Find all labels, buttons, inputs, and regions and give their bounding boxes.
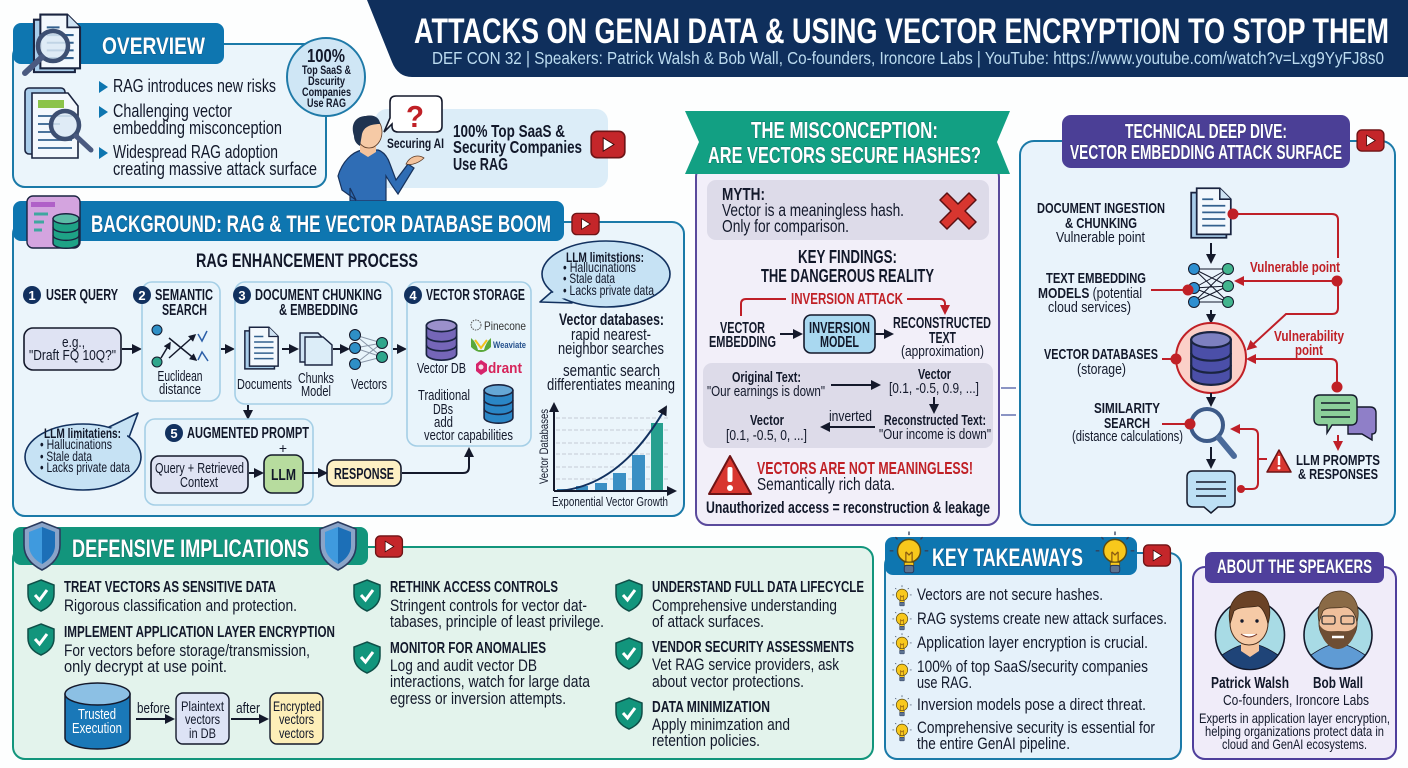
takeaway list: Vectors are not secure hashes. — [917, 586, 1103, 604]
speaker names — [1211, 675, 1369, 709]
callout text: Use RAG — [453, 154, 508, 174]
inversion attack diagram: INVERSION ATTACK — [791, 291, 903, 308]
overview bullets: Widespread RAG adoption — [113, 142, 278, 162]
step 5: augmented prompt: AUGMENTED PROMPT — [187, 425, 309, 442]
takeaway list: Comprehensive security is essential for — [917, 719, 1155, 737]
example box: Vector — [918, 367, 951, 383]
stage labels: cloud services) — [1048, 299, 1131, 316]
panel: defensive implications — [13, 522, 873, 759]
item: vendor security assessments: VENDOR SECURITY ASSESSMENTS — [652, 639, 854, 656]
speech bubble: LLM limitations left: • Hallucinations — [40, 436, 112, 452]
step 4: vector storage: Weaviate — [493, 340, 526, 350]
step 4: vector storage: drant — [488, 360, 522, 377]
stage labels — [1037, 200, 1183, 445]
diagram: encryption flow: vectors — [185, 711, 220, 727]
item: application layer encryption: For vectors before storage/transmission, — [64, 642, 310, 660]
speaker bio: cloud and GenAI ecosystems. — [1222, 736, 1367, 752]
myth box: MYTH: — [722, 184, 765, 204]
stage labels: SIMILARITY — [1094, 400, 1160, 417]
arrow — [1210, 243, 1212, 262]
step 2: semantic search: SEMANTIC — [155, 287, 213, 304]
speaker bio — [1199, 710, 1390, 752]
step 2: semantic search: Euclidean — [158, 369, 202, 385]
inversion attack diagram: VECTOR — [720, 320, 765, 337]
heading bar: KEY TAKEAWAYS — [932, 544, 1083, 572]
heading bar — [1062, 115, 1350, 168]
example box: Reconstructed Text: — [884, 413, 986, 429]
panel: technical deep dive — [1020, 115, 1395, 525]
response box: RESPONSE — [334, 466, 394, 483]
inversion attack diagram: EMBEDDING — [709, 334, 776, 351]
heading bar — [885, 532, 1137, 575]
step 3: document chunking and embedding: Chunks — [298, 371, 334, 387]
inversion attack diagram — [709, 291, 991, 360]
panel: securing AI callout — [338, 96, 625, 201]
stage labels: Vulnerable point — [1056, 229, 1146, 246]
inversion attack diagram: (approximation) — [901, 343, 984, 360]
heading: key findings: THE DANGEROUS REALITY — [761, 265, 934, 286]
icon: report magnifier — [25, 88, 91, 158]
callout text: Security Companies — [453, 137, 582, 157]
diagram: encryption flow — [65, 683, 323, 749]
item: understand data lifecycle — [616, 579, 864, 631]
speech bubble: question mark: ? — [406, 99, 424, 134]
stage labels: (distance calculations) — [1072, 428, 1183, 445]
arrow: response to storage — [402, 449, 469, 473]
speech bubble: LLM limitations left: • Stale data — [40, 448, 92, 464]
speech bubble: LLM limitations right: LLM limitstions: — [566, 249, 644, 265]
ribbon heading: ARE VECTORS SECURE HASHES? — [708, 142, 981, 168]
panel: overview — [13, 15, 365, 187]
step 3: document chunking and embedding: 3 — [238, 288, 246, 303]
step 4: vector storage: VECTOR STORAGE — [426, 287, 525, 304]
item: application layer encryption — [28, 624, 335, 676]
panel: background RAG — [13, 196, 684, 516]
overview bullets — [99, 76, 317, 179]
arrow — [221, 348, 233, 350]
item: monitor for anomalies: MONITOR FOR ANOMALIES — [390, 640, 546, 657]
arrow: bracket to magnifier — [1232, 429, 1267, 459]
diagram: encryption flow: Encrypted — [273, 698, 321, 714]
warning: vectors are not meaningless: VECTORS ARE NOT MEANINGLESS! — [757, 458, 973, 478]
speech bubble: LLM limitations left: LLM limitatiens: — [44, 425, 121, 441]
label: LLM prompts and responses — [1296, 452, 1380, 483]
item: data minimization: DATA MINIMIZATION — [652, 699, 770, 716]
label: LLM prompts and responses: & RESPONSES — [1298, 466, 1378, 483]
item: treat vectors: Rigorous classification and protection. — [64, 597, 297, 615]
example box: "Our income is down" — [879, 427, 991, 443]
step 1: user query: USER QUERY — [46, 287, 118, 304]
connector dashes — [1001, 388, 1016, 415]
example box: inverted — [829, 409, 872, 425]
item: vendor security assessments: about vector protections. — [652, 673, 804, 691]
step 5: augmented prompt: + — [279, 440, 287, 456]
text: vector databases: semantic search — [563, 361, 660, 380]
icon: video button — [1144, 545, 1170, 566]
item: application layer encryption: only decrypt at use point. — [64, 658, 227, 676]
step 3: document chunking and embedding: DOCUMENT CHUNKING — [255, 287, 382, 304]
icon: document — [1191, 188, 1231, 238]
arrow — [122, 348, 140, 350]
callout text — [453, 121, 582, 174]
stage labels: VECTOR DATABASES — [1044, 346, 1158, 363]
diagram: encryption flow: after — [236, 700, 260, 717]
callout: 100% badge — [287, 38, 365, 116]
label: vulnerability point: point — [1295, 342, 1323, 359]
callout: 100% badge: Use RAG — [307, 96, 346, 110]
example box — [703, 363, 993, 448]
item: understand data lifecycle: of attack surfaces. — [652, 613, 764, 631]
item: monitor for anomalies: Log and audit vector DB — [390, 657, 537, 675]
icon: video button — [591, 131, 625, 158]
step 4: vector storage: Vector DB — [417, 360, 466, 377]
callout: 100% badge: Top SaaS & — [302, 63, 351, 77]
speaker names: Co-founders, Ironcore Labs — [1223, 692, 1369, 709]
diagram: encryption flow: vectors — [279, 711, 314, 727]
portrait: Bob Wall — [1304, 591, 1372, 669]
example box: [0.1, -0.5, 0, ...] — [726, 428, 807, 444]
text: vector databases: rapid nearest- — [571, 325, 651, 344]
speech bubble: LLM limitations right: • Stale data — [563, 270, 615, 286]
callout text: 100% Top SaaS & — [453, 121, 565, 141]
heading: key findings: KEY FINDINGS: — [798, 246, 897, 267]
label: vulnerable point: Vulnerable point — [1250, 259, 1340, 276]
speech bubble: LLM limitations right: • Hallucinations — [563, 259, 636, 275]
step 4: vector storage — [404, 282, 531, 446]
diagram: encryption flow: Execution — [72, 720, 122, 737]
text: unauthorized access: Unauthorized access = reconstruction & leakage — [706, 499, 990, 517]
speaker names: Bob Wall — [1313, 675, 1363, 692]
item: rethink access controls: RETHINK ACCESS CONTROLS — [390, 579, 558, 596]
item: rethink access controls: Stringent controls for vector dat- — [390, 597, 587, 615]
chart: exponential vector growth: Exponential Vector Growth — [552, 494, 668, 509]
text: vector databases — [547, 310, 675, 394]
warning: vectors are not meaningless: Semantically rich data. — [757, 474, 895, 494]
speech bubble: LLM limitations right: • Lacks private data — [563, 282, 654, 298]
diagram: encryption flow: Plaintext — [181, 698, 224, 714]
icon: vector database highlighted — [1176, 323, 1246, 393]
step 4: vector storage: DBs — [433, 401, 453, 418]
attack paths — [1151, 208, 1342, 493]
step 1: user query — [23, 286, 121, 370]
stage labels: TEXT EMBEDDING — [1046, 270, 1146, 287]
step 1: user query: e.g., — [62, 334, 85, 351]
item: treat vectors: TREAT VECTORS AS SENSITIVE DATA — [64, 579, 276, 596]
heading: overview: OVERVIEW — [102, 33, 205, 60]
example box: Original Text: — [732, 370, 801, 386]
myth box — [707, 180, 989, 240]
person illustration — [338, 115, 424, 201]
item: vendor security assessments: Vet RAG service providers, ask — [652, 656, 840, 674]
item: understand data lifecycle: Comprehensive understanding — [652, 597, 837, 615]
label: securing AI: Securing AI — [387, 135, 444, 151]
takeaway list: Inversion models pose a direct threat. — [917, 696, 1146, 714]
step 5: augmented prompt: Context — [180, 474, 219, 491]
item: data minimization: retention policies. — [652, 732, 760, 750]
callout: 100% badge: 100% — [307, 46, 345, 66]
takeaway list: the entire GenAI pipeline. — [917, 735, 1070, 753]
portrait: Patrick Walsh — [1216, 591, 1284, 670]
item: monitor for anomalies: egress or inversion attempts. — [390, 690, 566, 708]
icon: stack and database — [27, 196, 80, 248]
heading: RAG enhancement process: RAG ENHANCEMENT PROCESS — [196, 251, 418, 272]
overview bullets: embedding misconception — [113, 118, 282, 138]
icon: video button — [572, 213, 599, 235]
item: rethink access controls — [354, 579, 604, 631]
ribbon heading — [685, 111, 1010, 174]
text: vector databases: neighbor searches — [558, 339, 664, 358]
step 5: augmented prompt: Query + Retrieved — [155, 460, 244, 477]
step 4: vector storage: Pinecone — [484, 319, 526, 333]
step 1: user query: 1 — [28, 288, 36, 303]
step 4: vector storage: vector capabilities — [424, 427, 513, 444]
step 3: document chunking and embedding: Vectors — [351, 377, 387, 393]
stage labels: (storage) — [1077, 361, 1126, 378]
item: monitor for anomalies — [354, 640, 591, 708]
step 5: augmented prompt — [145, 419, 313, 505]
title banner — [367, 0, 1408, 77]
item: understand data lifecycle: UNDERSTAND FULL DATA LIFECYCLE — [652, 579, 864, 596]
item: rethink access controls: tabases, principle of least privilege. — [390, 613, 604, 631]
warning: vectors are not meaningless — [709, 456, 973, 494]
heading bar: DEFENSIVE IMPLICATIONS — [72, 535, 309, 563]
response box — [327, 460, 401, 486]
chart: exponential vector growth: Vector Databases — [537, 409, 551, 484]
heading: key findings — [761, 246, 934, 286]
arrow — [1337, 435, 1339, 449]
speech bubble: question mark — [384, 96, 442, 134]
item: treat vectors — [28, 579, 297, 615]
myth box: Only for comparison. — [722, 216, 849, 236]
arrow — [247, 405, 249, 418]
diagram: encryption flow: Trusted — [78, 706, 116, 723]
callout: 100% badge: Dscurity — [308, 74, 345, 88]
item: application layer encryption: IMPLEMENT APPLICATION LAYER ENCRYPTION — [64, 624, 335, 641]
step 5: augmented prompt: 5 — [170, 426, 178, 441]
inversion attack diagram: MODEL — [820, 334, 859, 351]
text: vector databases: differentiates meaning — [547, 375, 675, 394]
icon: red X — [940, 193, 976, 229]
takeaway list: Application layer encryption is crucial. — [917, 634, 1148, 652]
takeaway list: RAG systems create new attack surfaces. — [917, 610, 1167, 628]
item: data minimization — [616, 698, 790, 750]
step 3: document chunking and embedding: Documents — [237, 377, 292, 393]
background heading bar — [13, 201, 564, 241]
icon: warning triangle — [1267, 450, 1291, 472]
connector: bracket to response — [1241, 459, 1258, 489]
icon: video button — [1357, 130, 1384, 151]
overview heading bar — [13, 23, 224, 64]
takeaway list — [892, 585, 1167, 753]
item: monitor for anomalies: interactions, watch for large data — [390, 673, 591, 691]
step 3: document chunking and embedding: Model — [301, 384, 331, 400]
inversion attack diagram: TEXT — [929, 330, 956, 347]
inversion attack diagram: RECONSTRUCTED — [893, 315, 991, 332]
icon: embedding network — [1188, 264, 1234, 308]
inversion attack diagram: INVERSION — [809, 320, 870, 337]
label: LLM prompts and responses: LLM PROMPTS — [1296, 452, 1380, 469]
overview bullets: RAG introduces new risks — [113, 76, 276, 96]
item: data minimization: Apply minimzation and — [652, 716, 790, 734]
stage labels: MODELS (potential — [1038, 285, 1142, 302]
step 1: user query: "Draft FQ 10Q?" — [29, 347, 116, 364]
example box: Vector — [750, 413, 784, 429]
heading bar — [1205, 552, 1384, 583]
label: vulnerability point: Vulnerability — [1274, 328, 1345, 345]
speaker names: Patrick Walsh — [1211, 675, 1289, 692]
callout: 100% badge: Companies — [302, 85, 351, 99]
arrow — [1210, 447, 1212, 467]
icon: similarity magnifier — [1191, 409, 1234, 456]
speech bubble: LLM limitations left — [25, 413, 141, 490]
icon: LLM chat bubbles — [1314, 395, 1376, 440]
icon: response chat — [1187, 471, 1235, 513]
example box: "Our earnings is down" — [707, 384, 825, 400]
text: vector databases: Vector databases: — [559, 310, 664, 329]
panel: key takeaways — [885, 532, 1181, 759]
step 2: semantic search: 2 — [138, 288, 146, 303]
step 5: augmented prompt: LLM — [271, 467, 296, 484]
takeaway list: use RAG. — [917, 674, 972, 692]
diagram: encryption flow: before — [137, 700, 170, 717]
ribbon heading: THE MISCONCEPTION: — [751, 117, 938, 143]
arrow — [393, 348, 405, 350]
step 4: vector storage: 4 — [409, 288, 417, 303]
step 2: semantic search: SEARCH — [162, 302, 207, 319]
diagram: encryption flow: in DB — [189, 725, 216, 741]
heading bar: TECHNICAL DEEP DIVE: — [1125, 121, 1287, 143]
overview bullets: Challenging vector — [113, 101, 232, 121]
step 3: document chunking and embedding: & EMBEDDING — [279, 302, 358, 319]
icon: video button — [376, 536, 402, 557]
icon: document magnifier — [25, 15, 80, 73]
step 2: semantic search: distance — [159, 382, 201, 398]
item: vendor security assessments — [616, 638, 854, 691]
arrow — [304, 472, 326, 474]
step 4: vector storage: add — [434, 414, 453, 431]
example box: [0.1, -0.5, 0.9, ...] — [889, 381, 979, 397]
step 3: document chunking and embedding — [233, 282, 392, 404]
speech bubble: LLM limitations right — [540, 241, 670, 307]
heading bar — [13, 522, 368, 570]
panel: about the speakers — [1193, 552, 1396, 759]
panel: misconception — [685, 111, 1010, 525]
arrow — [1210, 310, 1212, 322]
heading: background: BACKGROUND: RAG & THE VECTOR DATABASE BOOM — [91, 211, 551, 238]
speech bubble: LLM limitations left: • Lacks private data — [40, 459, 130, 475]
label: vulnerability point — [1274, 328, 1345, 359]
stage labels: DOCUMENT INGESTION — [1037, 200, 1165, 217]
stage labels: SEARCH — [1104, 415, 1150, 432]
diagram: encryption flow: vectors — [279, 725, 314, 741]
step 4: vector storage: Traditional — [418, 387, 470, 404]
myth box: Vector is a meaningless hash. — [722, 200, 904, 220]
stage labels: & CHUNKING — [1065, 215, 1137, 232]
overview bullets: creating massive attack surface — [113, 159, 317, 179]
takeaway list: 100% of top SaaS/security companies — [917, 658, 1148, 676]
chart: exponential vector growth — [537, 404, 675, 509]
arrow — [1210, 393, 1212, 405]
step 2: semantic search — [133, 282, 220, 401]
